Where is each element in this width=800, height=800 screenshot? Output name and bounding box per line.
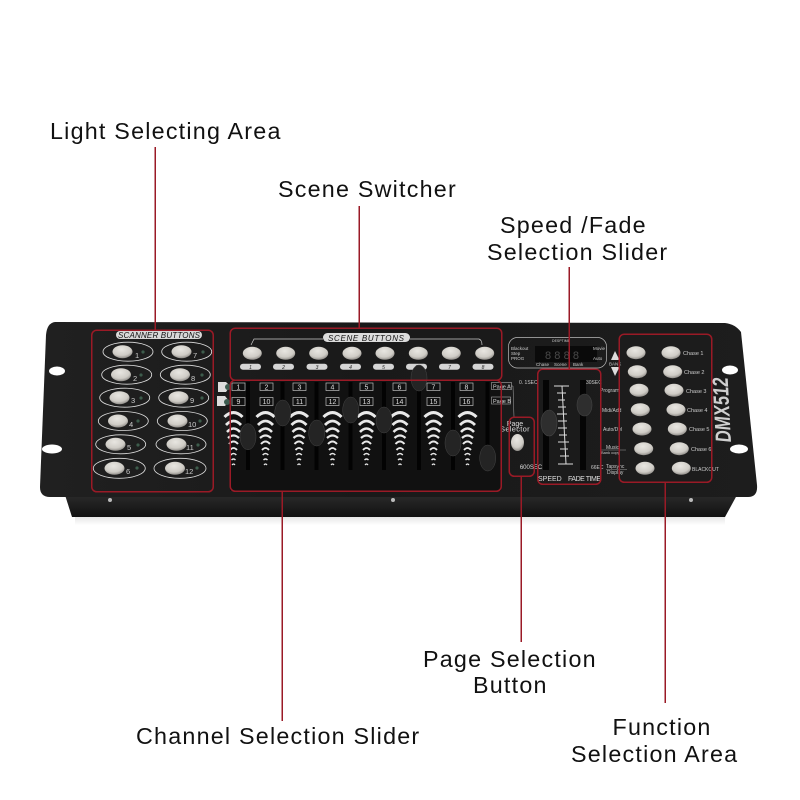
page A and B labels: Page A [493,384,511,390]
channel numbers: 16 [463,399,470,406]
heading: Page Selection Button: Button [473,672,548,698]
scanner buttons group: 5 [127,443,131,452]
scanner buttons group: 3 [131,396,135,405]
bank arrows [609,351,621,376]
heading: Speed /Fade Selection Slider [487,212,668,265]
callout box: scene switcher [230,328,502,380]
scanner buttons group: 11 [186,443,194,452]
channel numbers: 10 [263,399,270,406]
scene buttons group: 5 [382,365,385,371]
scene buttons group: 1 [249,365,252,371]
function buttons: Chase 2 [684,370,704,376]
heading: Light Selecting Area: Light Selecting Area [50,118,282,144]
function labels middle column: Program [600,388,619,394]
speed and fade sliders [519,380,604,483]
LED display: Bank [573,362,584,367]
heading: Channel Selection Slider: Channel Selection Slider [136,723,420,749]
channel numbers: 2 [265,384,269,392]
function buttons: BLACKOUT [692,467,719,473]
LED display: Movie [593,346,606,351]
speed and fade sliders: 0. 1SEC [519,380,538,386]
speed and fade sliders: 30SEC [586,380,602,386]
heading: Function Selection Area: Function [612,714,712,740]
function buttons: Chase 5 [689,427,710,433]
channel numbers: 13 [363,399,370,406]
LED display [508,338,606,368]
scanner buttons group: 10 [188,420,196,429]
page selector button: 600SEC [520,465,543,471]
scanner buttons group: 2 [133,374,137,383]
function labels middle column [600,388,627,476]
scene buttons group: 7 [448,365,451,371]
channel numbers [232,383,473,406]
LED display: Chase [536,362,550,367]
page selector button [500,421,543,471]
leader line: scene switcher [358,206,360,328]
heading: Function Selection Area: Selection Area [571,741,738,767]
scanner buttons group: SCANNER BUTTONS [118,331,201,340]
channel numbers: 11 [296,399,303,406]
LED display: PROG [511,356,525,361]
scene buttons group [240,333,494,371]
scanner buttons group: 4 [129,420,133,429]
scanner buttons group: 7 [193,351,197,360]
function labels middle column: Midi/Add [602,408,622,414]
function buttons: Chase 3 [686,389,706,395]
function buttons [626,346,719,475]
scene buttons group: 6 [415,365,418,371]
function labels middle column: Display [607,470,624,476]
heading: Function Selection Area [571,714,738,767]
leader line: function selection [664,482,666,703]
channel numbers: 9 [237,399,241,406]
callout outlines and leader lines [92,147,712,721]
callout box: light selecting area [92,330,213,492]
speed and fade sliders: FADE TIME [568,476,601,483]
fader knobs [240,365,496,471]
heading: Page Selection Button: Page Selection [423,646,597,672]
device lower chassis [65,495,737,525]
LED display: 8888 [545,350,579,362]
scanner buttons group: 8 [191,374,195,383]
LED display: DESPTIME [552,339,571,343]
device: DMX512 console [40,322,757,525]
callout box: channel selection slider [230,380,501,491]
LED display: Auto [593,356,603,361]
callout box: function selection area [619,334,712,482]
heading: Page Selection Button [423,646,597,698]
function labels middle column: Music [606,445,620,451]
scene buttons group: SCENE BUTTONS [328,334,405,343]
leader line: light selecting area [154,147,156,330]
fader tracks [246,382,490,470]
channel numbers: 14 [396,399,403,406]
page selector button: Page [507,421,523,428]
callout box: page selection button [509,417,534,476]
channel numbers: 1 [237,384,241,392]
function labels middle column: Tapsync [606,464,625,470]
function buttons: Chase 4 [687,408,708,414]
page A and B labels [492,382,514,417]
device front panel [40,322,757,497]
LED display: Blackout [511,346,529,351]
leader line: channel selection [281,491,283,721]
channel numbers: 6 [398,384,402,392]
callout box: speed and fade slider [538,369,601,484]
heading: Speed /Fade Selection Slider: Speed /Fade [500,212,647,238]
channel numbers: 8 [465,384,469,392]
speed and fade sliders: 66EC [591,465,604,471]
scanner buttons group: 1 [135,351,139,360]
function labels middle column: Bank copy [601,450,620,455]
LED display: Scene [554,362,567,367]
function buttons: Chase 1 [683,351,704,357]
channel numbers: 15 [430,399,437,406]
LED display: Step [511,351,521,356]
heading: Speed /Fade Selection Slider: Selection Slider [487,239,668,265]
scene buttons group: 3 [316,365,319,371]
scene buttons group: 2 [281,365,285,371]
heading: Scene Switcher: Scene Switcher [278,176,457,202]
fader scale chevrons [224,412,476,465]
page selector button: Selector [500,424,530,434]
channel numbers: 5 [365,384,369,392]
function buttons: Chase 6 [691,447,712,453]
scanner buttons group: 6 [126,467,130,476]
scene buttons group: 4 [349,365,352,371]
page indicator tabs [217,382,231,406]
leader line: speed fade [568,267,570,369]
scanner buttons group: 12 [185,467,193,476]
speed and fade sliders: SPEED [538,476,562,483]
page A and B labels: Page B [493,399,511,405]
function labels middle column: Auto/Del [603,427,622,433]
channel numbers: 7 [432,384,436,392]
scene buttons group: 8 [482,365,485,371]
channel numbers: 12 [329,399,336,406]
DMX512 logo: DMX512 [708,376,736,443]
channel numbers: 3 [298,384,302,392]
scanner buttons group [93,331,212,478]
scanner buttons group: 9 [190,396,194,405]
leader line: page selection [520,476,522,642]
bank arrows: BANK [609,362,621,366]
channel numbers: 4 [331,384,335,392]
